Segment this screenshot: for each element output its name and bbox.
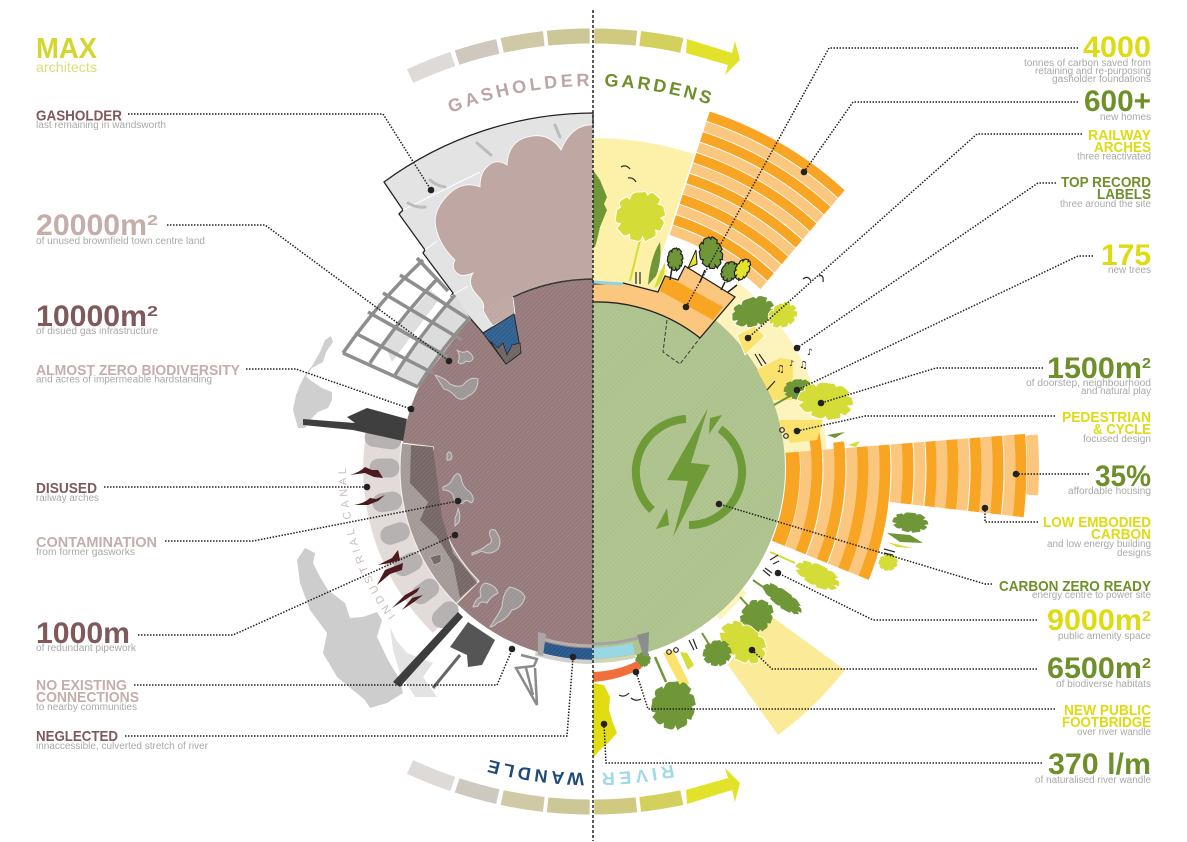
orange housing fan: right: [772, 432, 1039, 580]
label: pedestrian and cycle: focused design: [1083, 434, 1151, 445]
leader: no connections: [134, 646, 515, 685]
label: 1500m2: 1500m: [1047, 352, 1142, 385]
label: 9000m2: 2: [1142, 608, 1151, 625]
logo: MAX architects: architects: [36, 59, 97, 75]
label: almost zero biodiversity: ALMOST ZERO BIODIVERSITY: [36, 362, 240, 379]
label: 370 l/m: 370 l/m: [1048, 748, 1151, 781]
label: top record labels: [1060, 174, 1151, 210]
label: gasholder: last remaining in wandsworth: [36, 120, 166, 131]
left context: grey blobs: [293, 336, 437, 708]
leader: railway arches: [745, 134, 1082, 341]
label: 370 l/m: of naturalised river wandle: [1035, 775, 1151, 786]
energy centre icon: [636, 408, 742, 537]
centre dividing line: [592, 10, 594, 841]
railway arches inset: [400, 443, 479, 604]
label: pedestrian and cycle: & CYCLE: [1093, 421, 1151, 438]
small icons: birds, people, bikes, music: ♪: [807, 348, 813, 358]
trees and yellow patches: right: [728, 292, 860, 447]
label: railway arches: three reactivated: [1077, 152, 1151, 162]
label: carbon zero ready: [999, 578, 1151, 601]
contamination blobs: [435, 350, 525, 627]
label: carbon zero ready: energy centre to power site: [1032, 590, 1151, 601]
label: new public footbridge: [1062, 702, 1151, 738]
label: 20000m2: [36, 209, 205, 247]
leader: pipework: [138, 532, 458, 635]
arc heading: gasholder gardens: GASHOLDER: [448, 74, 589, 112]
leader: gasholder: [128, 114, 434, 193]
label: 10000m2: 10000m: [36, 300, 147, 333]
label: gasholder: GASHOLDER: [36, 108, 122, 124]
leader: neglected river: [125, 654, 576, 736]
logo: MAX architects: MAX: [36, 33, 98, 65]
label: 35%: 35%: [1095, 460, 1151, 493]
circle hatch overlay: [401, 276, 785, 660]
label: 9000m2: public amenity space: [1058, 631, 1151, 642]
label: top record labels: three around the site: [1060, 199, 1151, 210]
label: 4000: gasholder foundations: [1052, 74, 1151, 85]
label: almost zero biodiversity: and acres of impermeable hardstanding: [36, 374, 212, 386]
label: top record labels: LABELS: [1097, 186, 1151, 203]
label: railway arches: ARCHES: [1094, 139, 1151, 156]
label: 175: new trees: [1108, 265, 1151, 276]
label: 1000m: of redundant pipework: [36, 643, 137, 654]
label: no existing connections: [36, 677, 139, 713]
label: 600+: new homes: [1100, 112, 1151, 123]
leader: record labels: [794, 183, 1056, 351]
top progress arrow arc: [410, 36, 740, 76]
label: disused: DISUSED: [36, 480, 97, 497]
orange housing fan: top: [670, 112, 845, 290]
arc heading: gasholder gardens: [448, 74, 712, 112]
leader: carbon zero: [716, 501, 992, 584]
label: no existing connections: to nearby communities: [36, 702, 137, 713]
label: railway arches: RAILWAY: [1088, 127, 1151, 144]
leader: 35%: [1013, 471, 1089, 477]
label: contamination: from former gasworks: [36, 547, 135, 558]
label: 6500m2: 2: [1142, 655, 1151, 672]
label: 9000m2: 9000m: [1047, 604, 1142, 637]
label: low embodied carbon: CARBON: [1091, 526, 1151, 543]
label: 1000m: 1000m: [36, 617, 130, 650]
gasholder cloud footprint: [435, 125, 593, 326]
label: low embodied carbon: [1043, 514, 1151, 559]
label: 1500m2: and natural play: [1081, 386, 1151, 397]
label: no existing connections: NO EXISTING: [36, 677, 127, 694]
label: low embodied carbon: LOW EMBODIED: [1043, 514, 1151, 531]
label: 1500m2: of doorstep, neighbourhood: [1026, 378, 1151, 389]
label: disused: railway arches: [36, 493, 99, 504]
trees and planting: lower right: [593, 510, 930, 758]
arc heading: gasholder gardens: GARDENS: [605, 74, 712, 104]
icon: pylon: [516, 655, 537, 705]
leader: 9000m2: [775, 570, 1037, 620]
label: contamination: CONTAMINATION: [36, 534, 157, 551]
arc heading: river wandle: WANDLE: [488, 760, 584, 786]
small icons: birds, people, bikes, music: ♪: [789, 359, 794, 368]
label: 20000m2: of unused brownfield town centre land: [36, 236, 205, 247]
leader: biodiversity: [246, 369, 414, 412]
label: railway arches: [1077, 127, 1151, 162]
leader: pedestrian: [794, 416, 1055, 434]
dark building and chimney: [303, 408, 407, 441]
label: pedestrian and cycle: PEDESTRIAN: [1062, 409, 1151, 426]
label: neglected: NEGLECTED: [36, 728, 118, 745]
leader: 175 trees: [794, 256, 1093, 393]
label: 10000m2: 2: [147, 303, 158, 320]
pale yellow landscape sectors: [592, 138, 845, 735]
label: low embodied carbon: and low energy building: [1047, 539, 1151, 550]
small icons: birds, people, bikes, music: ♫: [776, 364, 785, 375]
contamination plumes: [350, 467, 423, 610]
trees and planting: top: [593, 170, 753, 292]
label: 600+: 600+: [1084, 85, 1151, 118]
leader: contamination: [165, 498, 461, 541]
label: 6500m2: of biodiverse habitats: [1056, 679, 1151, 690]
label: neglected: [36, 728, 209, 752]
label: 10000m2: of disued gas infrastructure: [36, 326, 158, 337]
label: 4000: tonnes of carbon saved from: [1024, 58, 1151, 69]
label: 35%: [1068, 460, 1151, 497]
label: no existing connections: CONNECTIONS: [36, 689, 139, 706]
leader: low embodied carbon: [982, 505, 1038, 522]
label: disused: [36, 480, 99, 504]
grey gas frame grid: [343, 258, 470, 387]
label: new public footbridge: over river wandle: [1077, 727, 1151, 738]
leader: 6500m2: [749, 647, 1037, 669]
leader: 20000m2: [167, 225, 452, 364]
arc heading: river wandle: RIVER: [602, 765, 674, 785]
leader: footbridge: [633, 669, 1055, 709]
label: pedestrian and cycle: [1062, 409, 1151, 445]
label: top record labels: TOP RECORD: [1061, 174, 1151, 191]
label: neglected: innaccessible, culverted stretch of river: [36, 741, 209, 752]
label: gasholder: [36, 108, 166, 131]
re-used gasholder building: [593, 266, 735, 364]
gasholder structure: [384, 113, 593, 333]
label: 175: 175: [1101, 239, 1151, 272]
leader: 600+: [801, 102, 1078, 175]
label: 20000m2: 2: [147, 212, 158, 229]
label: 4000: 4000: [1083, 31, 1151, 64]
label: 1500m2: 2: [1142, 355, 1151, 372]
gasholder pit: [483, 279, 593, 364]
label: 1500m2: [1026, 352, 1151, 397]
label: 35%: affordable housing: [1068, 486, 1151, 497]
culverted river wandle: [535, 632, 592, 662]
dark pipe and building at lower left: [393, 612, 495, 688]
leader: 1500m2: [818, 368, 1043, 406]
label: low embodied carbon: designs: [1117, 548, 1151, 559]
label: 4000: retaining and re-purposing: [1035, 66, 1151, 77]
label: 4000: [1024, 31, 1151, 85]
label: carbon zero ready: CARBON ZERO READY: [999, 578, 1151, 595]
label: 6500m2: 6500m: [1047, 652, 1142, 685]
label: new public footbridge: FOOTBRIDGE: [1062, 714, 1151, 731]
canal label: INDUSTRIAL CANAL: [338, 468, 395, 620]
label: 20000m2: 20000m: [36, 209, 147, 242]
new river wandle and footbridge: [592, 632, 649, 682]
brown existing-site half circle: [401, 276, 593, 660]
small icons: birds, people, bikes, music: [619, 166, 895, 700]
small icons: birds, people, bikes, music: ♫: [799, 360, 808, 371]
industrial canal ring with arches: [363, 437, 592, 633]
label: contamination: [36, 534, 157, 558]
leader: 4000: [683, 48, 1078, 310]
arc heading: river wandle: [488, 760, 674, 786]
leader: disused arches: [104, 484, 370, 490]
label: new public footbridge: NEW PUBLIC: [1064, 702, 1151, 719]
leader: 370 l/m: [601, 721, 1042, 763]
label: almost zero biodiversity: [36, 362, 240, 386]
green future-site half circle: [593, 276, 785, 660]
bottom progress arrow arc: [410, 767, 740, 807]
